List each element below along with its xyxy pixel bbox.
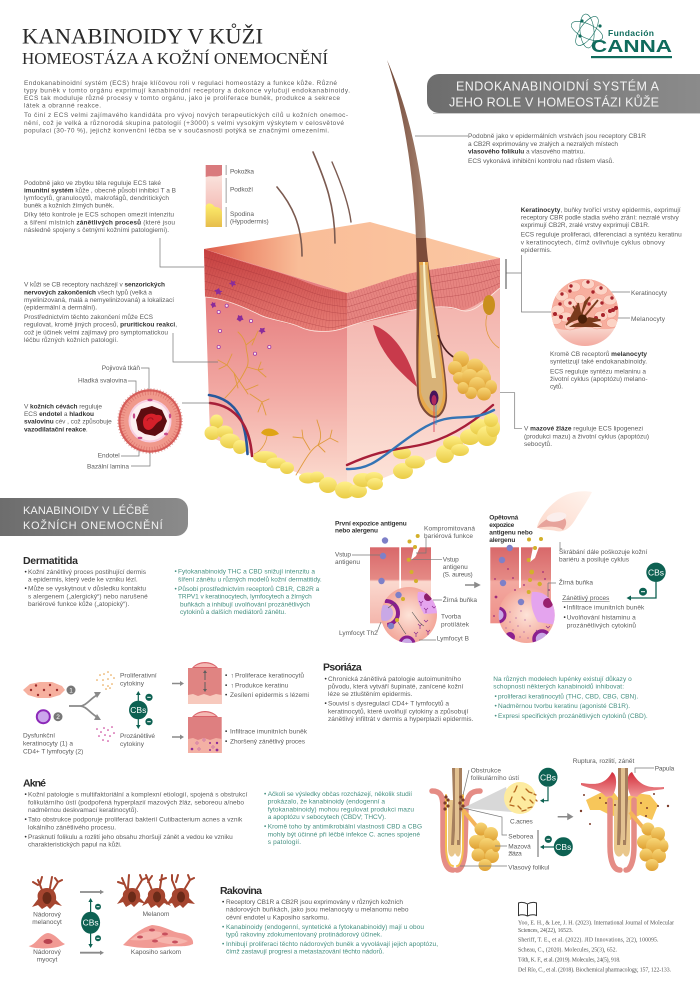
labels: První expozice antigenu <box>335 520 407 527</box>
diagram: acne follicle with obstruction <box>432 768 573 871</box>
diagram: repeated antigen exposure: prozánětlivých cytokinů <box>567 621 636 629</box>
text: sensory nerve endings: regulovat, kromě jiných procesů, pruritickou reakci, <box>24 321 177 329</box>
panel: cancer text: Rakovina <box>220 885 262 897</box>
icon: book <box>518 902 536 916</box>
diagram: psoriasis pathway: CD4+ T lymfocyty (2) <box>23 748 83 755</box>
labels: Ruptura, rozlití, zánět <box>573 758 634 765</box>
text: sensory nerve endings: (epidermální a dermální). <box>24 305 97 312</box>
text: sensory nerve endings: což je účinek velmi zajímavý pro symptomatickou <box>24 329 168 336</box>
vessel labels and text: Bazální lamina <box>87 463 129 470</box>
text: melanocytes: Kromě CB receptorů melanocyty <box>550 350 647 358</box>
diagram: cancer <box>29 875 195 964</box>
pro-inflammatory cytokines <box>96 726 115 742</box>
diagram: repeated antigen exposure: Opětovná <box>489 514 519 521</box>
panel: dermatitis text <box>23 555 148 608</box>
panel: acne cannabinoids: Ačkoli se výsledky občas rozcházejí, několik studií <box>268 791 412 798</box>
hyperproliferation effects: • <box>225 682 228 689</box>
labels: Vstup <box>443 557 459 564</box>
panel: acne cannabinoids: s patologií. <box>268 839 301 846</box>
panel: acne text: folikulárního ústí (podpořená hyperplazií mazových žláz, seboreou a/nebo <box>28 799 244 806</box>
hyperproliferation effects: Zesílení epidermis s lézemi <box>230 692 309 699</box>
labels: Seborea <box>508 833 534 840</box>
panel: cancer text: čímž zastavují progresi a metastazování těchto nádorů. <box>226 948 384 956</box>
vessel labels and text: Endotel <box>98 453 120 460</box>
panel: psoriasis cannabinoids: Expresi specifických prozánětlivých cytokinů (CBD). <box>498 712 648 720</box>
labels: Papula <box>655 766 675 773</box>
CBs blocks bacteria: CBs <box>540 772 556 782</box>
panel: cancer text: typů rakoviny zdokumentovaný protinádorový účinek. <box>226 931 382 939</box>
diagram: cancer: Nádorový <box>33 949 62 956</box>
panel: psoriasis cannabinoids: • <box>494 713 498 720</box>
infiltration effects <box>225 728 308 745</box>
immune cells <box>210 280 271 355</box>
panel: cancer text: Inhibují proliferaci těchto nádorových buněk a vyvolávají jejich apoptózu, <box>226 941 438 948</box>
panel: acne cannabinoids: Kromě toho by antimikrobiální vlastnosti CBD a CBG <box>268 824 422 831</box>
legend: skin layers: (Hypodermis) <box>230 218 269 225</box>
arrow between acne stages <box>558 814 572 819</box>
skin columns <box>370 547 431 623</box>
text: sensory nerve endings: nervových zakončeních všech typů (velká a <box>24 288 152 296</box>
labels: Kompromitovaná <box>424 526 475 533</box>
diagram: cancer: Melanom <box>143 911 169 918</box>
panel: psoriasis text: Psoriáza <box>323 662 362 674</box>
diagram: psoriasis pathway: Proliferativní <box>120 672 157 679</box>
text: immune system: a šíření místních zánětlivých procesů (které jsou <box>24 218 175 226</box>
magnification cone <box>463 787 512 812</box>
diagram: psoriasis pathway: Dysfunkční <box>23 733 55 740</box>
intro text block: typy buněk v tomto orgánu exprimují kanabinoidní receptory a dokonce vylučují endokanabinoidy. <box>24 88 350 94</box>
CBs blocks seborrhea <box>540 836 573 856</box>
panel: cancer text: Receptory CB1R a CB2R jsou exprimovány v různých kožních <box>226 898 403 906</box>
debris <box>580 793 669 825</box>
text: immune system: buněk a kožních žírných buněk. <box>24 203 114 210</box>
labels <box>335 520 477 642</box>
legend: skin layers: Pokožka <box>230 169 254 176</box>
references: Yoo, E. H., & Lee, J. H. (2023). International Journal of Molecular <box>518 919 674 926</box>
blood vessels on left face <box>209 395 252 456</box>
panel: psoriasis cannabinoids: • <box>494 693 498 700</box>
vessel labels and text: vazodilatační reakce. <box>24 426 88 433</box>
hyperproliferation effects <box>225 671 309 699</box>
panel: acne cannabinoids <box>264 791 422 846</box>
panel: psoriasis text: Souvisí s dysregulací CD4+ T lymfocytů a <box>328 700 449 708</box>
panel: dermatitis text: Dermatitida <box>23 555 78 567</box>
panel: dermatitis cannabinoids: Fytokanabinoidy THC a CBD snižují intenzitu a <box>178 568 315 575</box>
panel: psoriasis text: • <box>324 676 328 683</box>
text: keratinocytes: v keratinocytech, čímž ovlivňuje cyklus obnovy <box>521 239 665 246</box>
vessel cross-section circle <box>118 389 182 453</box>
intro text block: Endokanabinoidní systém (ECS) hraje klíčovou roli v regulaci homeostázy a funkce kůže. Různé <box>24 79 337 87</box>
keratinocyte and melanocyte circle <box>550 278 668 346</box>
panel: psoriasis text: původu, která vytváří šupinaté, zanícené kožní <box>328 682 463 690</box>
blood vessels on right face <box>347 405 494 469</box>
panel: psoriasis cannabinoids: • <box>494 703 498 710</box>
banner: treatment of skin diseases: KOŽNÍCH ONEMOCNĚNÍ <box>23 519 164 532</box>
text: melanocytes <box>550 350 648 391</box>
panel: psoriasis cannabinoids: schopnosti některých kanabinoidů inhibovat: <box>493 683 624 691</box>
text: sensory nerve endings: léčbu různých kožních patologií. <box>24 336 118 344</box>
tumor melanocyte <box>32 877 62 909</box>
references <box>518 919 674 974</box>
keratinocyte and melanocyte circle: Melanocyty <box>631 316 666 323</box>
arrow between exposures <box>465 583 479 587</box>
intro text block: populaci (30-70 %), jejichž konvenční léčba se v současnosti potýká se značnými omezeními. <box>24 128 329 135</box>
hyperproliferation effects: ↑ <box>230 672 234 679</box>
text: hair follicle: Podobně jako v epidermálních vrstvách jsou receptory CB1R <box>468 133 646 140</box>
panel: acne text: charakteristických papul na kůži. <box>28 841 122 849</box>
panel: dermatitis text: • <box>24 586 28 593</box>
labels: Lymfocyt Th2 <box>339 630 378 637</box>
vessel labels and text: V kožních cévách reguluje <box>24 403 102 410</box>
panel: psoriasis cannabinoids: proliferaci keratinocytů (THC, CBD, CBG, CBN). <box>498 692 638 700</box>
panel: acne cannabinoids: prokázalo, že kanabinoidy (endogenní a <box>268 799 385 806</box>
CBs regulator: CBs <box>83 918 99 928</box>
panel: dermatitis text: • <box>24 569 28 576</box>
legend: skin layers: Spodina <box>230 211 254 218</box>
text: sensory nerve endings: Prostřednictvím těchto zakončení může ECS <box>24 313 154 321</box>
panel: psoriasis text: keratinocytů, které uvolňují cytokiny a způsobují <box>328 707 468 715</box>
diagram: repeated antigen exposure: antigenu nebo <box>489 530 533 537</box>
labels: nebo alergenu <box>335 528 378 535</box>
right face of skin <box>347 258 500 493</box>
text: keratinocytes: Keratinocyty, buňky tvořící vrstvy epidermis, exprimují <box>521 207 681 214</box>
diagram: repeated antigen exposure: Žírná buňka <box>559 577 593 586</box>
panel: psoriasis text: • <box>324 701 328 708</box>
CBs inhibition of inflammation <box>626 563 666 600</box>
panel: dermatitis cannabinoids: šíření zánětu u různých modelů kožní dermatitidy. <box>178 576 322 584</box>
fat tissue lobes <box>204 413 500 498</box>
text: melanocytes: ECS reguluje syntézu melaninu a <box>550 368 646 375</box>
labels: Žírná buňka <box>443 595 477 604</box>
panel: acne text: Akné <box>23 778 46 790</box>
leader lines <box>121 136 630 466</box>
diagram: cancer: melanocyt <box>32 919 62 926</box>
labels: Obstrukce <box>471 768 501 775</box>
labels: žláza <box>508 851 522 858</box>
title <box>22 22 328 68</box>
diagram: repeated antigen exposure: bariéru a posiluje cyklus <box>559 557 630 564</box>
diagram: psoriasis pathway: Prozánětlivé <box>120 733 155 740</box>
C. acnes circle <box>504 782 537 825</box>
melanoma cells <box>117 875 195 908</box>
text: sensory nerve endings <box>24 281 177 344</box>
diagram: psoriasis pathway: 2 <box>56 714 60 721</box>
labels: folikulárního ústí <box>471 775 519 782</box>
fingertip with nail <box>537 491 592 531</box>
keratinocyte and melanocyte circle: Keratinocyty <box>631 290 668 297</box>
CBs regulator: CBs <box>130 705 146 715</box>
panel: psoriasis cannabinoids: Nadměrnou tvorbu keratinu (agonisté CB1R). <box>498 703 630 710</box>
labels: Mazová <box>508 843 531 850</box>
antigen markers <box>378 534 420 629</box>
panel: acne text: nadměrnou deskvamací keratinocytů). <box>28 806 138 814</box>
panel: dermatitis text: bariérové funkce kůže („atopický“). <box>28 600 129 608</box>
text: keratinocytes: receptory CBR podle stadia svého zrání: nezralé vrstvy <box>521 214 679 222</box>
vessel labels and text: ECS endotel a hladkou <box>24 411 94 418</box>
text: hair follicle: vlasového folikulu a vlasového matrixu. <box>468 149 585 156</box>
diagram: cancer: Nádorový <box>33 911 62 918</box>
panel: dermatitis cannabinoids: TRPV1 v keratinocytech, lymfocytech a žírných <box>178 594 312 601</box>
hyperproliferation effects: Proliferace keratinocytů <box>235 671 304 679</box>
panel: acne text: • <box>24 834 28 841</box>
text: sensory nerve endings: myelinizovaná, malá a nemyelinizovaná) a lokalizací <box>24 297 174 304</box>
muscle <box>373 325 417 387</box>
references: Sheriff, T. E., et al. (2022). JID Innovations, 2(2), 100095. <box>518 937 659 944</box>
small hairs <box>277 152 351 256</box>
text: keratinocytes <box>521 207 682 254</box>
diagram: cancer: Kaposiho sarkom <box>131 949 181 956</box>
labels: antigenu <box>443 564 468 571</box>
text: hair follicle: ECS vykonává inhibiční kontrolu nad růstem vlasů. <box>468 157 614 165</box>
panel: dermatitis cannabinoids: Působí prostřednictvím receptorů CB1R, CB2R a <box>178 585 320 593</box>
CBs blocks seborrhea: CBs <box>555 842 571 852</box>
panel: psoriasis text: zánětlivý infiltrát v dermis a hyperplazii epidermis. <box>328 716 473 723</box>
banner: treatment of skin diseases <box>0 498 188 536</box>
labels: antigenu <box>335 559 360 566</box>
hair and follicle <box>387 60 455 432</box>
panel: acne text <box>23 778 247 849</box>
panel: acne cannabinoids: fytokanabinoidy) mohou regulovat produkci mazu <box>268 806 414 813</box>
intro text block: látek a obranné reakce. <box>24 103 101 110</box>
text: immune system: Díky této kontrole je ECS schopen omezit intenzitu <box>24 212 174 219</box>
references: Tóth, K. F., et al. (2019). Molecules, 24(5), 918. <box>518 957 621 964</box>
obstruction plugs <box>443 795 465 811</box>
text: immune system: lymfocytů, granulocytů, makrofágů, dendritických <box>24 194 169 202</box>
hyperproliferation effects: • <box>225 692 228 699</box>
diagram: repeated antigen exposure: • <box>564 614 566 621</box>
intro text block: ECS tak moduluje různé procesy v tomto orgánu, jako je proliferace buněk, produkce a sekrece <box>24 94 340 102</box>
text: immune system <box>24 180 176 234</box>
vessel labels and text: Pojivová tkáň <box>102 365 140 372</box>
nerve endings <box>218 331 338 475</box>
diagram: psoriasis pathway: 1 <box>69 687 73 694</box>
sebum duct <box>463 810 478 828</box>
labels: Lymfocyt B <box>437 635 469 642</box>
labels <box>573 758 675 773</box>
diagram: psoriasis pathway: cytokiny <box>120 680 145 687</box>
text: hair follicle <box>468 133 646 165</box>
banner: treatment of skin diseases: KANABINOIDY V LÉČBĚ <box>23 504 149 517</box>
panel: psoriasis text <box>323 662 473 723</box>
panel: cancer text: cévní endotel u Kaposiho sarkomu. <box>226 914 329 921</box>
skin cross-section illustration <box>204 60 500 498</box>
intro text block: nění, což je velká a různorodá skupina patologií (+3000) s velmi vysokým výskytem v celosvětové <box>24 119 344 127</box>
labels: protilátek <box>441 621 470 628</box>
panel: psoriasis cannabinoids: Na různých modelech lupénky existují důkazy o <box>493 675 632 683</box>
panel: dermatitis text: Kožní zánětlivý proces postihující dermis <box>28 569 147 576</box>
panel: dermatitis cannabinoids: • <box>174 568 178 575</box>
red papule wings <box>581 772 664 797</box>
top surface of skin <box>204 222 500 293</box>
legend: skin layers: Podkoží <box>230 187 253 194</box>
text: immune system: následně spojeny s četnými kožními patologiemi). <box>24 227 169 234</box>
references: Sciences, 24(22), 16523. <box>518 927 574 934</box>
epidermis layers <box>204 249 500 332</box>
title: KANABINOIDY V KŮŽI <box>22 22 263 48</box>
text: hair follicle: a CB2R exprimovány ve zralých a nezralých místech <box>468 141 618 148</box>
diagram: repeated antigen exposure: expozice <box>489 522 515 529</box>
text: melanocytes: cytů. <box>550 383 563 391</box>
infiltration effects: Infiltrace imunitních buněk <box>230 728 308 735</box>
labels: Vstup <box>335 552 351 559</box>
hyperproliferation effects: ↑ <box>230 682 234 689</box>
diagram: repeated antigen exposure: Zánětlivý proces <box>562 595 610 602</box>
banner: endocannabinoid system heading: JEHO ROLE V HOMEOSTÁZI KŮŽE <box>449 95 659 110</box>
text: melanocytes: životní cyklus (apoptózu) melano- <box>550 376 648 383</box>
text: sebaceous gland: sebocytů. <box>524 440 552 448</box>
panel: psoriasis text: léze se ztluštěním epidermis. <box>328 691 412 698</box>
panel: psoriasis cannabinoids <box>493 675 648 720</box>
banner: endocannabinoid system heading <box>427 74 700 114</box>
panel: acne cannabinoids: a apoptózu v sebocytech (CBDV; THCV). <box>268 814 386 821</box>
labels: (S. aureus) <box>443 572 473 579</box>
receptor: encapsulated ending left <box>254 429 279 454</box>
split arrow <box>69 695 97 717</box>
CBs blocks bacteria <box>538 768 558 803</box>
Kaposi sarcoma cells <box>123 925 193 948</box>
text: sebaceous gland: V mazové žláze reguluje ECS lipogenezi <box>524 426 643 433</box>
diagram: psoriasis pathway <box>23 662 309 755</box>
infiltration effects: • <box>225 728 228 735</box>
panel: cancer text <box>220 885 438 956</box>
intro text block <box>24 79 350 135</box>
tumor myocyte <box>29 933 65 948</box>
diagram: ruptured follicle papule <box>573 758 675 871</box>
skin block: hyperproliferation <box>188 662 222 704</box>
logo: Fundación CANNA <box>569 13 672 58</box>
labels: Vlasový folikul <box>508 864 550 871</box>
vessel labels and text: svalovinu cév , což způsobuje <box>24 418 112 426</box>
title: HOMEOSTÁZA A KOŽNÍ ONEMOCNĚNÍ <box>22 49 328 68</box>
panel: acne text: lokálního zánětlivého procesu. <box>28 824 116 831</box>
panel: acne cannabinoids: mohly být účinné při léčbě infekce C. acnes spojené <box>268 831 420 838</box>
hair shaft <box>448 768 462 857</box>
receptor: encapsulated ending right <box>483 295 499 348</box>
diagram: repeated antigen exposure: alergenu <box>489 537 515 544</box>
panel: acne text: Tato obstrukce podporuje proliferaci bakterií Cutibacterium acnes a vznik <box>28 817 243 824</box>
panel: acne text: • <box>24 792 28 799</box>
sebaceous gland <box>469 822 500 871</box>
diagram: repeated antigen exposure: Infiltrace imunitních buněk <box>567 605 645 612</box>
sebaceous gland <box>448 351 497 400</box>
panel: dermatitis cannabinoids: cytokinů a dalších mediátorů zánětu. <box>180 608 286 616</box>
left face of skin <box>204 249 347 493</box>
logo: Fundación CANNA: Fundación <box>608 28 654 38</box>
diagram: first antigen exposure <box>335 520 477 651</box>
labels <box>460 768 550 871</box>
panel: acne text: Kožní patologie s multifaktoriální a komplexní etiologií, spojená s obstrukcí <box>28 792 247 799</box>
text: keratinocytes: ECS reguluje proliferaci, diferenciaci a syntézu keratinu <box>521 232 682 239</box>
panel: cancer text: nádorových buňkách, jako jsou melanocyty u melanomu nebo <box>226 907 409 914</box>
diagram: repeated antigen exposure: Škrábání dále poškozuje kožní <box>559 547 647 556</box>
gray arrows <box>172 681 184 740</box>
hyperproliferation effects: Produkce keratinu <box>235 682 289 689</box>
keratinocyte cluster <box>23 682 65 698</box>
burst sebum <box>586 790 658 820</box>
diagram: psoriasis pathway: cytokiny <box>120 741 145 748</box>
text: sebaceous gland: (produkci mazu) a životní cyklus (apoptózu) <box>524 433 649 440</box>
panel: cancer text: • <box>222 899 225 906</box>
references: Scheau, C., (2020). Molecules, 25(3), 652. <box>518 947 618 954</box>
panel: cancer text: • <box>222 941 225 948</box>
vessel labels and text: Hladká svalovina <box>78 377 127 384</box>
follicle wall <box>610 800 634 870</box>
logo: Fundación CANNA: CANNA <box>591 36 672 56</box>
infiltration effects: • <box>225 738 228 745</box>
banner: endocannabinoid system heading: ENDOKANABINOIDNÍ SYSTÉM A <box>456 79 660 94</box>
references: Del Río, C., et al. (2018). Biochemical pharmacology, 157, 122-133. <box>518 967 672 974</box>
panel: dermatitis cannabinoids <box>174 568 322 616</box>
text: immune system: imunitní systém kůže , obecně působí inhibici T a B <box>24 186 176 194</box>
diagram: repeated antigen exposure <box>489 491 666 647</box>
panel: acne text: • <box>24 817 28 824</box>
gray arrows <box>80 890 104 955</box>
panel: cancer text: • <box>222 924 225 931</box>
diagram: repeated antigen exposure: Uvolňování histaminu a <box>567 614 636 621</box>
text: keratinocytes: epidermis. <box>521 247 552 254</box>
diagram: repeated antigen exposure: • <box>564 605 566 612</box>
panel: acne text: Prasknutí folikulu a rozlití jeho obsahu zhoršují zánět a vedou ke vzniku <box>28 834 233 841</box>
panel: dermatitis text: a epidermis, který vede ke vzniku lézí. <box>28 577 138 584</box>
legend: skin layers <box>206 165 269 227</box>
infiltration effects: Zhoršený zánětlivý proces <box>230 738 306 745</box>
panel: acne cannabinoids: • <box>264 791 267 798</box>
text: keratinocytes: exprimují CB2R, zralé vrstvy exprimují CB1R. <box>521 222 650 229</box>
text: immune system: Podobně jako ve zbytku těla reguluje ECS také <box>24 180 161 187</box>
panel: dermatitis text: s alergenem („alergický“) nebo narušené <box>28 593 148 600</box>
panel: psoriasis text: Chronická zánětlivá patologie autoimunitního <box>328 676 461 683</box>
vessel labels and text <box>24 365 140 470</box>
sebaceous gland <box>637 822 668 871</box>
skin block: immune infiltration <box>188 711 222 753</box>
panel: cancer text: Kanabinoidy (endogenní, syntetické a fytokanabinoidy) mají u obou <box>226 924 424 931</box>
follicle wall <box>432 791 480 870</box>
diagram: psoriasis pathway: keratinocyty (1) a <box>23 741 73 748</box>
diagram: cancer: myocyt <box>37 957 57 964</box>
hyperproliferation effects: • <box>225 672 228 679</box>
labels: Tvorba <box>441 614 461 621</box>
CBs regulator <box>81 898 101 948</box>
CBs regulator <box>129 691 153 729</box>
proliferative cytokines <box>96 671 115 690</box>
CBs inhibition of inflammation: CBs <box>648 568 664 578</box>
panel: acne cannabinoids: • <box>264 824 267 831</box>
C. acnes circle: C.acnes <box>510 818 533 825</box>
panel: dermatitis text: Může se vyskytnout v důsledku kontaktu <box>28 585 146 593</box>
hair shaft <box>614 768 645 857</box>
text: melanocytes: syntetizují také endokanabinoidy. <box>550 358 647 366</box>
zoom circle <box>381 587 437 643</box>
panel: dermatitis cannabinoids: buňkách a inhibují uvolňování prozánětlivých <box>180 601 310 608</box>
intro text block: To činí z ECS velmi zajímavého kandidáta pro vývoj nových terapeutických cílů u kožních onemoc- <box>24 111 348 119</box>
text: sebaceous gland <box>524 426 649 448</box>
text: sensory nerve endings: V kůži se CB receptory nacházejí v senzorických <box>24 281 165 289</box>
labels: bariérová funkce <box>424 533 473 540</box>
T lymphocyte <box>37 710 50 723</box>
panel: dermatitis cannabinoids: • <box>174 586 178 593</box>
